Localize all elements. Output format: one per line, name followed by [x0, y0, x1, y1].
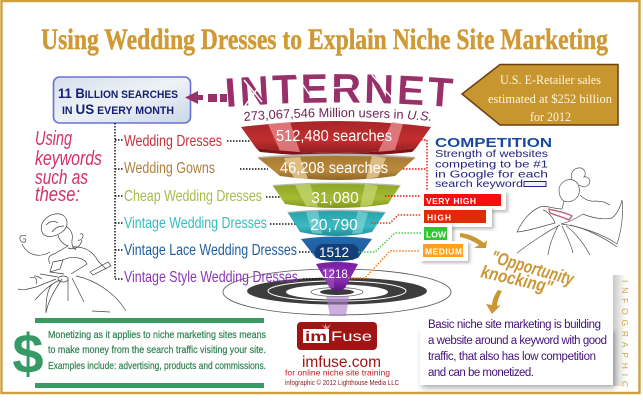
callout: e-retailer sales: U.S. E-Retailer sales: [500, 72, 601, 87]
funnel layer: red: 512,480 searches: [276, 128, 392, 145]
arrow: to opportunity knocking: [460, 233, 487, 248]
funnel layer: purple: [316, 262, 358, 291]
credits: for online niche site training: [285, 368, 390, 378]
callout: e-retailer sales: estimated at $252 billion: [488, 91, 612, 106]
panel: monetizing: [12, 318, 266, 388]
heading: INTERNET: INTERNET: [226, 74, 454, 107]
callout: e-retailer sales: for 2012: [530, 109, 571, 124]
badge: low: LOW: [426, 230, 447, 240]
arrow: internet to searches: [185, 91, 227, 104]
description: in Google for each: [435, 170, 548, 180]
callout: opportunity knocking: knocking": [479, 261, 555, 297]
funnel layer: purple: 1218: [322, 269, 348, 281]
callout: e-retailer sales: [462, 64, 618, 125]
funnel: [241, 121, 431, 291]
callout: 11 billion searches: [54, 77, 190, 123]
icon: bride sketch right: [517, 168, 623, 255]
competition connectors: [348, 140, 427, 278]
monetizing text: Examples include: advertising, products and commissions.: [48, 360, 266, 372]
callout: 11 billion searches: 11 BILLION SEARCHES: [58, 85, 178, 101]
text: using keywords: such as: [35, 167, 88, 189]
monetizing text: Monetizing as it applies to niche marketing sites means: [48, 329, 266, 341]
vertical label: infographic: INFOGRAPHIC: [620, 280, 630, 387]
callout: 11 billion searches: IN US EVERY MONTH: [62, 101, 174, 117]
text: using keywords: [35, 128, 102, 206]
keyword list: Wedding Dresses: [124, 133, 222, 150]
competition badges: [420, 191, 506, 261]
credits: infographic © 2012 Lighthouse Media LLC: [285, 378, 399, 387]
monetizing text: to make money from the search traffic visiting your site.: [48, 344, 266, 356]
description: [435, 149, 549, 190]
panel: explanation: a website around a keyword with good: [428, 335, 607, 347]
funnel layer: red: [241, 121, 431, 156]
badge: very high: VERY HIGH: [426, 196, 476, 206]
funnel layer: tan: 46,208 searches: [280, 160, 388, 177]
logo: imFuse: im: [305, 328, 327, 344]
panel: competition: [435, 136, 552, 190]
target graphic: [223, 269, 451, 316]
infographic side strip: [613, 275, 626, 386]
keyword list: Wedding Gowns: [124, 160, 215, 177]
arrow: down to explanation: [486, 290, 502, 314]
badge: medium: MEDIUM: [425, 246, 462, 256]
callout: opportunity knocking: [460, 233, 577, 314]
keyword list: Vintage Wedding Dresses: [124, 215, 267, 232]
funnel layer: green: [272, 182, 401, 208]
logo: imFuse: Fuse: [331, 328, 372, 344]
logo: imFuse: [297, 322, 377, 350]
icon: dollar sign: $: [12, 322, 44, 385]
funnel layer: blue: [301, 236, 372, 262]
text: using keywords: these:: [35, 184, 80, 206]
credits: imfuse.com: [302, 354, 381, 371]
heading: competition: COMPETITION: [435, 136, 552, 150]
panel: explanation: traffic, that also has low competition: [428, 351, 596, 363]
funnel layer: tan: [257, 154, 416, 180]
description: Strength of websites: [435, 149, 548, 160]
text: using keywords: Using: [35, 128, 72, 150]
keyword list: [124, 133, 298, 286]
credits: [285, 354, 399, 387]
funnel layer: green: 31,080: [311, 190, 359, 207]
panel: explanation: Basic niche site marketing is building: [428, 319, 601, 331]
funnel layer: blue: 1512: [319, 245, 349, 260]
description: search keyword: [435, 179, 523, 190]
description: competing to be #1: [435, 160, 549, 170]
badge: high: HIGH: [427, 212, 451, 222]
keyword list: Vintage Style Wedding Dresses: [124, 269, 298, 286]
callout: opportunity knocking: "Opportunity: [489, 247, 577, 289]
monetizing text: [48, 329, 266, 372]
keyword list: Cheap Wedding Dresses: [124, 188, 262, 205]
text: users in US: 273,067,546 Million users in U.S.: [244, 108, 430, 121]
panel: explanation: [420, 314, 613, 385]
heading: INTERNET: [226, 74, 454, 107]
keyword connectors: [115, 123, 322, 279]
funnel layer: teal: 20,790: [310, 217, 358, 234]
icon: bride sketch left: [18, 214, 126, 313]
text: using keywords: keywords: [35, 148, 102, 170]
panel: explanation: and can be monetized.: [428, 367, 534, 379]
funnel layer: teal: [287, 210, 386, 236]
keyword list: Vintage Lace Wedding Dresses: [124, 242, 297, 259]
